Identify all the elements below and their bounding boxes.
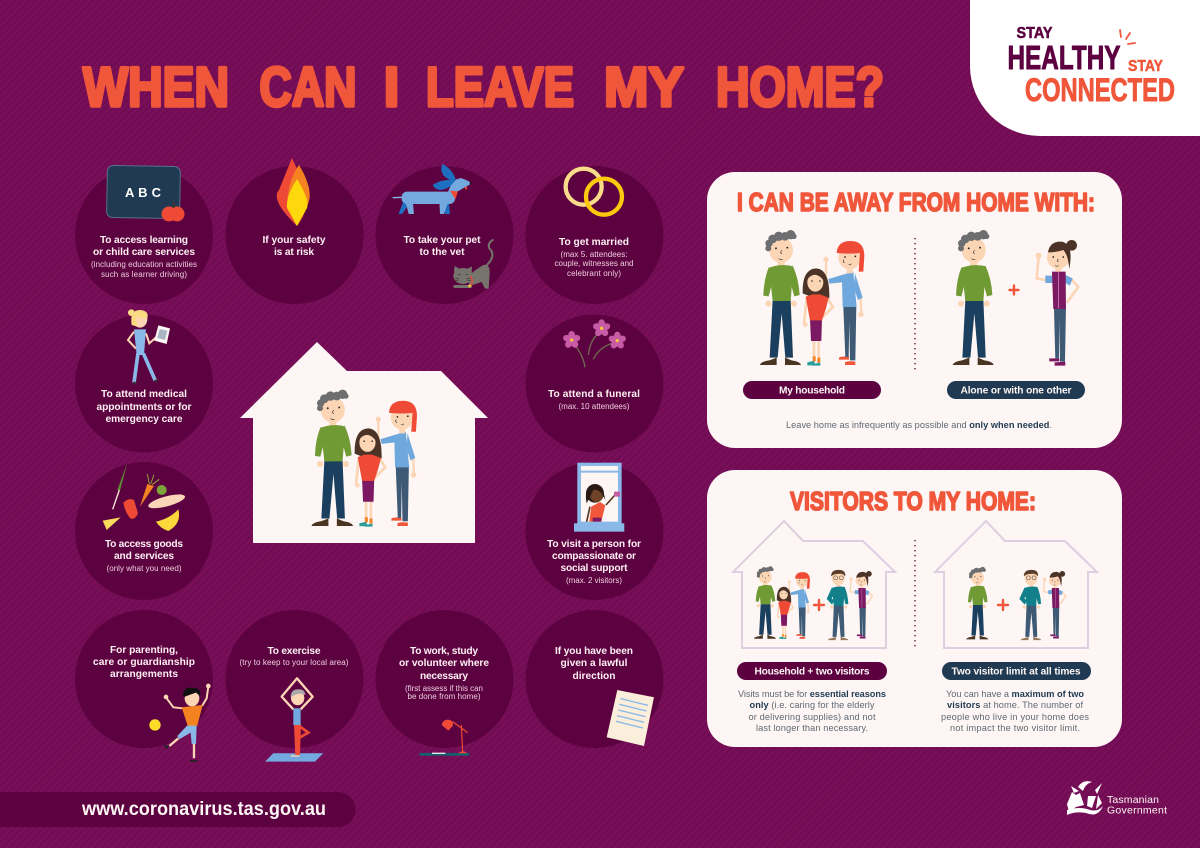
family illustration <box>312 390 417 527</box>
pill: my household: My household <box>779 386 845 396</box>
icon: flame <box>277 158 310 226</box>
text <box>96 389 192 425</box>
pill: alone or with one other <box>947 381 1085 399</box>
pill: my household <box>743 381 881 399</box>
pair illustration <box>953 230 1078 366</box>
text: maximum of two visitors: visitors at home. The number of <box>947 700 1083 710</box>
text: To take your pet <box>404 235 481 246</box>
title: HOME? <box>716 55 884 118</box>
text: care or guardianship <box>93 657 195 668</box>
text <box>105 539 183 573</box>
text: maximum of two visitors: You can have a maximum of two <box>946 689 1084 699</box>
pill: two visitor limit <box>942 662 1091 680</box>
text: (max. 10 attendees) <box>558 402 630 411</box>
circle: lawful direction <box>526 610 664 748</box>
circle: compassionate <box>526 462 664 600</box>
text: given a lawful <box>560 658 628 669</box>
title: MY <box>604 55 684 118</box>
circle: goods <box>75 462 213 600</box>
circle: work <box>376 610 514 756</box>
icon: window <box>574 463 624 532</box>
text: appointments or for <box>96 402 192 413</box>
text: To access learning <box>100 235 188 246</box>
text: and services <box>114 551 174 562</box>
Tasmanian Government logo: Government <box>1107 804 1167 816</box>
text <box>240 646 349 667</box>
text: or child care services <box>93 247 195 258</box>
text: (only what you need) <box>106 564 182 573</box>
icon: flowers <box>562 319 627 367</box>
text: For parenting, <box>110 645 178 656</box>
text: arrangements <box>110 669 178 680</box>
icon: child with ball <box>149 684 211 762</box>
footer web address: www.coronavirus.tas.gov.au <box>81 799 326 820</box>
Tasmanian Government logo: Tasmanian <box>1107 794 1159 806</box>
text: essential reasons: Visits must be for essential reasons <box>738 689 886 699</box>
text <box>262 235 326 258</box>
icon: logo mark <box>1067 781 1103 815</box>
logo: stay healthy stay connected <box>970 0 1200 136</box>
text: necessary <box>420 671 468 682</box>
text: be done from home) <box>408 692 481 701</box>
text: essential reasons: or delivering supplies) and not <box>748 712 876 722</box>
text: If you have been <box>555 646 633 657</box>
text: maximum of two visitors <box>941 689 1089 733</box>
text: maximum of two visitors: not impact the two visitor limit. <box>950 723 1080 733</box>
panel: visitors to my home <box>707 470 1122 747</box>
text: To attend a funeral <box>548 389 640 400</box>
house: two visitor limit <box>935 521 1097 648</box>
house: household plus two visitors <box>733 521 895 648</box>
icon: chalkboard: A B C <box>125 185 162 200</box>
text: To get married <box>559 237 629 248</box>
circle: learning <box>75 165 213 304</box>
text: emergency care <box>106 414 183 425</box>
title: I <box>384 55 399 118</box>
logo: stay healthy stay connected: STAY <box>1016 25 1053 42</box>
icon: yoga <box>265 678 323 762</box>
text: compassionate or <box>552 551 636 562</box>
text: to the vet <box>420 247 465 258</box>
text: (max. 2 visitors) <box>566 576 622 585</box>
icon: document <box>607 690 654 746</box>
text: couple, witnesses and <box>554 259 634 268</box>
text: If your safety <box>262 235 326 246</box>
icon: cat <box>453 240 493 289</box>
text: To visit a person for <box>547 539 641 550</box>
text: To work, study <box>410 646 478 657</box>
note: Leave home as infrequently as possible and only when needed. <box>786 420 1052 430</box>
heading: I CAN BE AWAY FROM HOME WITH: <box>737 187 1095 217</box>
text: is at risk <box>274 247 314 258</box>
logo: stay healthy stay connected: HEALTHY <box>1008 39 1120 76</box>
footer web address <box>0 792 356 827</box>
text: (including education activities <box>91 260 197 269</box>
circle: married <box>526 166 664 304</box>
text <box>93 645 195 680</box>
circle: medical <box>75 309 213 452</box>
text: (first assess if this can <box>405 684 483 693</box>
logo: stay healthy stay connected: STAY <box>1128 58 1163 75</box>
title: WHEN <box>83 55 229 118</box>
pill: alone or with one other: Alone or with one other <box>960 386 1072 396</box>
central house with family <box>240 342 488 543</box>
text <box>404 235 481 258</box>
text <box>547 539 641 585</box>
text: celebrant only) <box>567 269 621 278</box>
circle: parenting <box>75 610 213 762</box>
text: direction <box>572 671 616 682</box>
text <box>555 646 633 682</box>
title <box>83 55 884 118</box>
icon: dog <box>393 164 472 214</box>
icon: desk lamp <box>419 720 469 756</box>
circle: safety <box>226 158 364 304</box>
text: essential reasons: only (i.e. caring for the elderly <box>750 700 875 710</box>
text: (max 5. attendees: <box>560 250 628 259</box>
title: CAN <box>260 55 356 118</box>
circle: exercise <box>226 610 364 762</box>
heading: VISITORS TO MY HOME: <box>790 486 1036 516</box>
pill: two visitor limit: Two visitor limit at all times <box>952 666 1081 678</box>
text: To exercise <box>268 646 321 657</box>
icon: food <box>103 463 186 531</box>
text: essential reasons: last longer than necessary. <box>756 723 868 733</box>
text <box>554 237 634 278</box>
text <box>548 389 640 411</box>
pill: household plus two visitors: Household + two visitors <box>754 666 870 678</box>
Tasmanian Government logo <box>1067 781 1167 816</box>
text <box>399 646 489 701</box>
text: To attend medical <box>101 389 187 400</box>
text: essential reasons <box>738 689 886 733</box>
panel: I can be away from home with <box>707 172 1122 448</box>
text <box>91 235 197 279</box>
icon: rings <box>566 169 622 215</box>
household illustration <box>760 230 864 366</box>
text: (try to keep to your local area) <box>240 658 349 667</box>
icon: nurse <box>128 309 170 385</box>
text: To access goods <box>105 539 183 550</box>
text: social support <box>560 563 628 574</box>
circle: pet <box>376 164 514 304</box>
title: LEAVE <box>426 55 574 118</box>
text: such as learner driving) <box>101 270 187 279</box>
text: or volunteer where <box>399 658 489 669</box>
circle: funeral <box>526 314 664 452</box>
pill: household plus two visitors <box>737 662 887 680</box>
text: maximum of two visitors: people who live in your home does <box>941 712 1089 722</box>
